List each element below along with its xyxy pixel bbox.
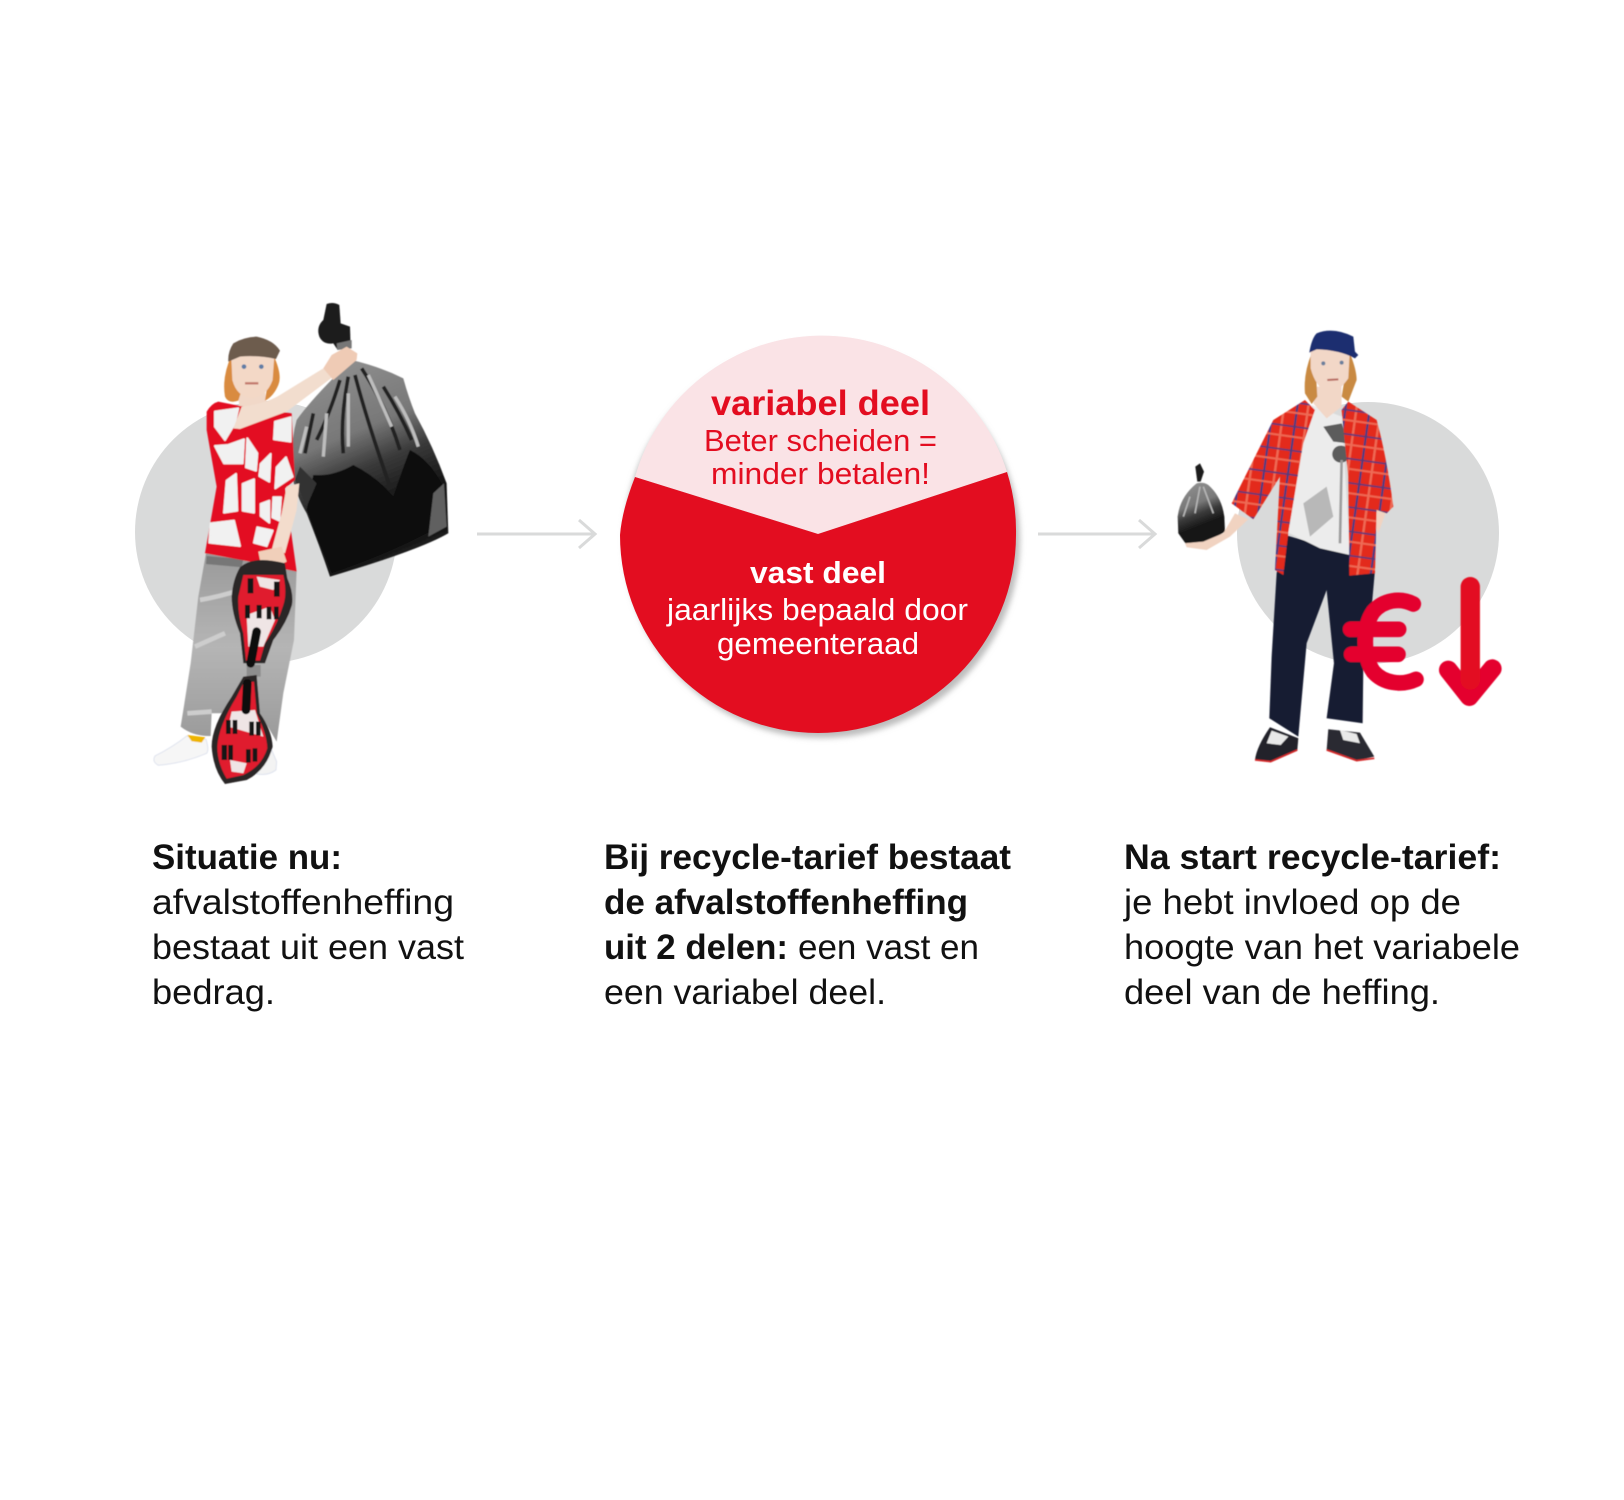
caption: na start recycle-tarief: deel van de heffing.: [1124, 973, 1440, 1012]
white t-shirt: [1288, 405, 1350, 555]
label: variabel deel: Beter scheiden =: [704, 423, 937, 458]
jeans: [181, 553, 297, 742]
fixed part: [620, 472, 1016, 733]
circle shadow: [624, 342, 1020, 738]
red plaid shirt: [1232, 400, 1393, 576]
flat brown cap: [228, 337, 280, 362]
label: vast deel: gemeenteraad: [717, 626, 919, 661]
caption: bij recycle-tarief: uit 2 delen:: [604, 928, 788, 967]
person with large waste bag: [154, 303, 448, 784]
caption: situatie nu: afvalstoffenheffing: [152, 883, 454, 922]
sneakers: [1255, 727, 1374, 762]
small waste bag: [1178, 463, 1225, 545]
white sneakers: [154, 735, 277, 774]
label: variabel deel: minder betalen!: [711, 456, 930, 491]
raised arm: [233, 368, 333, 429]
red patterned t-shirt: [205, 402, 297, 572]
navy cap: [1309, 331, 1358, 358]
label: variabel deel: [704, 384, 937, 491]
caption: situatie nu: bestaat uit een vast: [152, 928, 464, 967]
caption: na start recycle-tarief: je hebt invloed op de: [1123, 883, 1461, 922]
label: variabel deel: variabel deel: [711, 384, 930, 423]
caption: bij recycle-tarief: Bij recycle-tarief bestaat: [604, 838, 1011, 877]
person with small waste bag: [1178, 331, 1492, 762]
caption: na start recycle-tarief: Na start recycle-tarief:: [1124, 838, 1501, 877]
caption: situatie nu: Situatie nu:: [152, 838, 342, 877]
caption: situatie nu: bedrag.: [152, 973, 275, 1012]
label: vast deel: vast deel: [750, 555, 886, 590]
lowered arm: [272, 483, 299, 553]
label: vast deel: jaarlijks bepaald door: [666, 592, 968, 627]
caption: bij recycle-tarief: een variabel deel.: [604, 973, 886, 1012]
caption: na start recycle-tarief: hoogte van het variabele: [1124, 928, 1520, 967]
arrow: step one to step two: [477, 520, 595, 548]
caption: situatie nu: [152, 838, 464, 1012]
grey circle behind left person: [135, 401, 397, 663]
euro sign: [1351, 600, 1416, 683]
split circle: fee structure: [620, 336, 1020, 738]
neck: [1313, 387, 1342, 418]
arrow: step two to step three: [1038, 520, 1155, 548]
dark jeans: [1269, 535, 1375, 737]
caption: bij recycle-tarief: een vast en: [798, 928, 979, 967]
grey circle behind right person: [1237, 402, 1499, 664]
neck: [237, 390, 267, 408]
large black waste bag: [292, 303, 448, 577]
caption: na start recycle-tarief: [1123, 838, 1520, 1012]
variable part: [635, 336, 1007, 534]
down arrow: [1448, 587, 1492, 697]
right hand in pocket: [1373, 503, 1387, 533]
red waveboard: [212, 560, 292, 784]
hair and face: [224, 352, 280, 402]
forearm and hand: [1185, 513, 1248, 550]
caption: bij recycle-tarief: de afvalstoffenheffing: [604, 883, 968, 922]
caption: bij recycle-tarief: [604, 838, 1011, 1012]
hair and face: [1305, 348, 1357, 404]
label: vast deel: [666, 555, 968, 661]
